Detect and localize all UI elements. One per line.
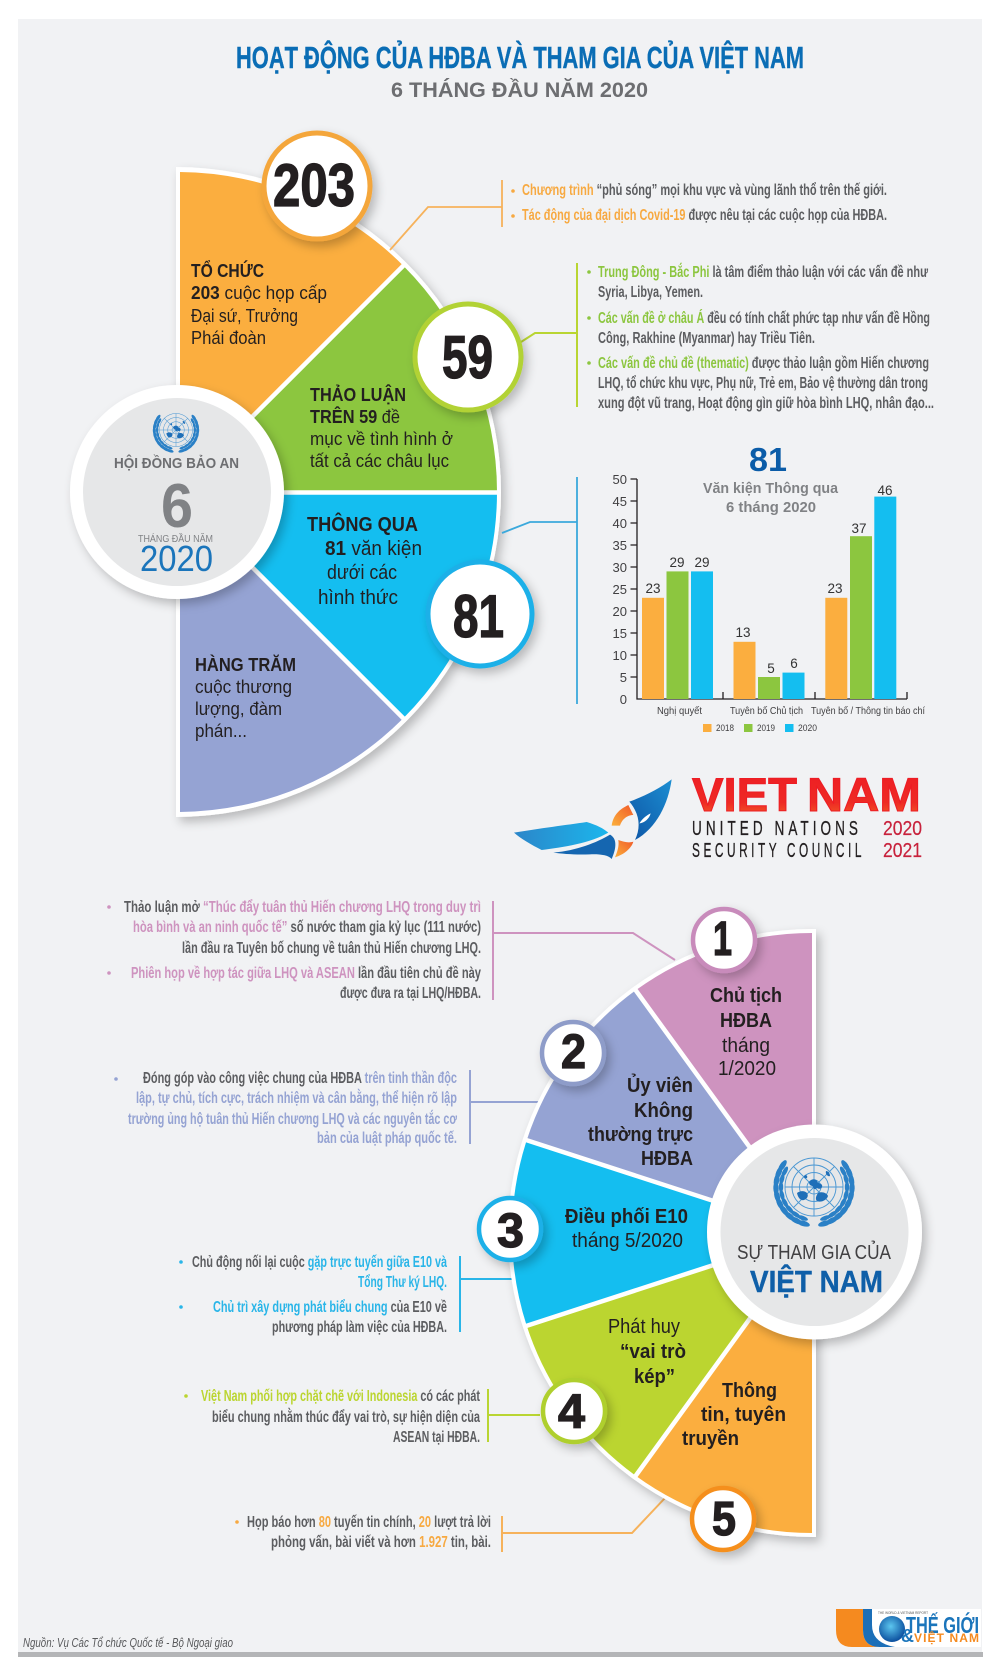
badge: 59 bbox=[415, 304, 521, 410]
badge: 203 bbox=[264, 133, 370, 239]
pie chart: Viet Nam participation bbox=[508, 929, 816, 1537]
y axis labels: 45 bbox=[613, 494, 627, 509]
text block: note 1: lần đầu ra Tuyên bố chung về tuân thủ Hiến chương LHQ. bbox=[182, 940, 481, 957]
sector: non-permanent member bbox=[527, 990, 812, 1233]
y axis labels: 10 bbox=[613, 648, 627, 663]
badge: 59: 59 bbox=[442, 324, 493, 391]
badge: 5: 5 bbox=[712, 1493, 736, 1546]
text block: note 2: lập, tự chủ, tích cực, trách nhiệm và cân bằng, thể hiện rõ lập bbox=[136, 1088, 457, 1107]
connector: 2 bbox=[470, 1070, 539, 1144]
text block: note 5 bbox=[235, 1514, 491, 1551]
subtitle: 6 THÁNG ĐẦU NĂM 2020 bbox=[391, 79, 648, 102]
legend: 2018 bbox=[716, 723, 734, 734]
text: non-permanent member: Ủy viên bbox=[627, 1073, 693, 1097]
text: dual role: Phát huy bbox=[608, 1316, 680, 1338]
text: adopted: dưới các bbox=[327, 562, 397, 584]
y axis labels: 0 bbox=[620, 692, 627, 707]
connector: 1 bbox=[493, 901, 675, 1000]
badge: 5 bbox=[692, 1488, 754, 1550]
text: information bbox=[682, 1380, 786, 1450]
logo: The Gioi & Viet Nam: THE WORLD & VIETNAM REPORT bbox=[878, 1611, 929, 1615]
text: organised: Phái đoàn bbox=[191, 327, 266, 348]
sector: organised bbox=[177, 172, 403, 492]
icon: UN emblem bbox=[153, 413, 199, 453]
text: negotiations: phán... bbox=[195, 720, 247, 741]
text block: note 4: ASEAN tại HĐBA. bbox=[393, 1429, 480, 1446]
bar chart: documents adopted bbox=[613, 441, 925, 734]
sector: E10 coordinator bbox=[512, 1140, 812, 1326]
chart number: 81 bbox=[749, 441, 787, 478]
group: press statements bbox=[825, 483, 896, 699]
text block: note 3: Tổng Thư ký LHQ. bbox=[358, 1273, 447, 1291]
badge: 81: 81 bbox=[453, 583, 504, 650]
text block: note 2: bản của luật pháp quốc tế. bbox=[317, 1130, 457, 1147]
text: president: HĐBA bbox=[720, 1010, 772, 1032]
text block: note 4 bbox=[184, 1388, 480, 1446]
text: discussed: tất cả các châu lục bbox=[310, 450, 449, 471]
connector: 59 bbox=[521, 263, 577, 407]
text: E10 coordinator: Điều phối E10 bbox=[565, 1206, 688, 1228]
text block: note 2 bbox=[114, 1070, 457, 1147]
y axis labels: 50 bbox=[613, 472, 627, 487]
text block: note 3: phương pháp làm việc của HĐBA. bbox=[272, 1319, 447, 1336]
hub title: VIỆT NAM bbox=[750, 1263, 883, 1299]
text: president: Chủ tịch bbox=[710, 985, 782, 1007]
connector: 203 bbox=[390, 180, 502, 250]
hub label: SỰ THAM GIA CỦA bbox=[737, 1240, 892, 1264]
chart title: Văn kiện Thông qua bbox=[703, 480, 839, 497]
text block: note 3: Chủ động nối lại cuộc gặp trực tuyến giữa E10 và bbox=[192, 1254, 447, 1271]
text: negotiations: HÀNG TRĂM bbox=[195, 654, 296, 675]
category labels bbox=[657, 705, 925, 717]
logo: Viet Nam UN Security Council: 2020 bbox=[883, 818, 922, 840]
text: non-permanent member bbox=[588, 1073, 693, 1170]
sector: adopted bbox=[177, 492, 497, 718]
logo: Viet Nam UN Security Council: 2021 bbox=[883, 840, 922, 862]
text: organised: TỔ CHỨC bbox=[191, 260, 264, 281]
group: presidential statements: 13 bbox=[735, 625, 751, 640]
y axis labels: 30 bbox=[613, 560, 627, 575]
text: non-permanent member: Không bbox=[634, 1100, 693, 1122]
text: E10 coordinator: tháng 5/2020 bbox=[572, 1230, 683, 1252]
text block: note 1 bbox=[107, 898, 481, 1002]
hub: Viet Nam participation bbox=[707, 1124, 922, 1340]
hub: security council bbox=[70, 385, 284, 599]
chart title: 6 tháng 2020 bbox=[726, 499, 816, 516]
text: adopted: hình thức bbox=[318, 587, 398, 609]
text: E10 coordinator bbox=[565, 1206, 688, 1252]
text block: note 3 bbox=[179, 1254, 447, 1336]
text: organised: 203 cuộc họp cấp bbox=[191, 282, 327, 303]
badge: 2: 2 bbox=[561, 1026, 586, 1079]
text block: note 2: trường ủng hộ tuân thủ Hiến chương LHQ và các nguyên tắc cơ bbox=[128, 1109, 457, 1128]
group: press statements: 23 bbox=[827, 581, 843, 596]
pie chart: activities bbox=[176, 167, 501, 817]
text block: 59 notes: Công, Rakhine (Myanmar) hay Triều Tiên. bbox=[598, 330, 815, 347]
chart title bbox=[703, 480, 839, 516]
group: resolutions: 29 bbox=[669, 555, 685, 570]
badge: 1 bbox=[693, 909, 755, 971]
text: dual role bbox=[608, 1316, 686, 1388]
text block: note 2: Đóng góp vào công việc chung của HĐBA trên tinh thần độc bbox=[143, 1070, 457, 1087]
group: presidential statements: 5 bbox=[767, 661, 775, 676]
text block: 59 notes bbox=[587, 262, 934, 412]
legend: 2020 bbox=[798, 723, 817, 734]
group: presidential statements bbox=[734, 625, 804, 699]
connector: 4 bbox=[488, 1389, 540, 1442]
text: organised bbox=[191, 260, 327, 348]
text: adopted: 81 văn kiện bbox=[325, 538, 422, 560]
group: resolutions bbox=[642, 555, 713, 699]
axes bbox=[630, 479, 907, 699]
text: non-permanent member: thường trực bbox=[588, 1124, 693, 1146]
sector: negotiations bbox=[180, 492, 403, 812]
badge: 203: 203 bbox=[273, 152, 355, 219]
text: negotiations: cuộc thương bbox=[195, 676, 292, 697]
group: resolutions: 29 bbox=[694, 555, 710, 570]
text: dual role: “vai trò bbox=[620, 1341, 686, 1363]
text block: note 4: Việt Nam phối hợp chặt chẽ với Indonesia có các phát bbox=[201, 1388, 480, 1405]
group: press statements: 46 bbox=[877, 483, 893, 498]
text: discussed bbox=[310, 384, 453, 471]
badge: 3: 3 bbox=[497, 1205, 524, 1258]
text block: 203 notes bbox=[511, 181, 887, 224]
legend: 2019 bbox=[757, 723, 775, 734]
text block: note 5: phỏng vấn, bài viết và hơn 1.927 tin, bài. bbox=[271, 1534, 491, 1551]
text block: note 3: Chủ trì xây dựng phát biểu chung của E10 về bbox=[213, 1298, 447, 1316]
text: president: 1/2020 bbox=[718, 1058, 776, 1080]
y axis labels: 25 bbox=[613, 582, 627, 597]
y axis labels: 40 bbox=[613, 516, 627, 531]
y axis labels: 35 bbox=[613, 538, 627, 553]
text: information: Thông bbox=[722, 1380, 777, 1402]
footer bar bbox=[18, 1652, 983, 1657]
text block: 59 notes: Syria, Libya, Yemen. bbox=[598, 284, 703, 301]
text block: note 4: biểu chung nhằm thúc đẩy vai trò, sự hiện diện của bbox=[212, 1407, 480, 1426]
text: non-permanent member: HĐBA bbox=[641, 1148, 693, 1170]
hub label: HỘI ĐỒNG BẢO AN bbox=[114, 454, 239, 472]
text: negotiations: lượng, đàm bbox=[195, 698, 282, 719]
sector: discussed bbox=[177, 266, 497, 492]
category labels: Nghị quyết bbox=[657, 705, 702, 717]
y axis labels: 15 bbox=[613, 626, 627, 641]
text: adopted bbox=[307, 512, 422, 609]
text: discussed: TRÊN 59 đề bbox=[310, 406, 400, 427]
badge: 4 bbox=[543, 1380, 605, 1442]
text: dual role: kép” bbox=[634, 1366, 675, 1388]
logo: The Gioi & Viet Nam: VIỆT NAM bbox=[914, 1630, 979, 1645]
text: discussed: mục về tình hình ở bbox=[310, 428, 453, 449]
logo: Viet Nam UN Security Council: UNITED NATIONS bbox=[692, 818, 862, 840]
text block: 203 notes: Tác động của đại dịch Covid-19 được nêu tại các cuộc họp của HĐBA. bbox=[522, 207, 887, 224]
icon: UN emblem bbox=[773, 1158, 855, 1228]
sector: information bbox=[636, 1233, 812, 1533]
y axis labels: 20 bbox=[613, 604, 627, 619]
badge: 3 bbox=[479, 1198, 541, 1260]
text: discussed: THẢO LUẬN bbox=[310, 384, 406, 405]
hub period: THÁNG ĐẦU NĂM bbox=[138, 532, 213, 545]
badge: 4: 4 bbox=[558, 1386, 585, 1439]
text: organised: Đại sứ, Trưởng bbox=[191, 305, 298, 326]
sector: president bbox=[636, 933, 812, 1233]
logo: The Gioi & Viet Nam bbox=[836, 1609, 981, 1647]
y axis labels: 5 bbox=[620, 670, 627, 685]
text: president bbox=[710, 985, 782, 1080]
hub number: 6 bbox=[161, 472, 193, 541]
logo: Viet Nam UN Security Council bbox=[514, 768, 922, 862]
badge: 1: 1 bbox=[713, 913, 732, 966]
category labels: Tuyên bố Chủ tịch bbox=[730, 705, 803, 717]
sector: dual role bbox=[527, 1233, 812, 1476]
text: information: tin, tuyên bbox=[701, 1404, 786, 1426]
text block: note 5: Họp báo hơn 80 tuyến tin chính, 20 lượt trả lời bbox=[247, 1514, 491, 1531]
connector: 3 bbox=[460, 1256, 513, 1332]
text: president: tháng bbox=[722, 1035, 770, 1057]
logo: Viet Nam UN Security Council: NAM bbox=[807, 768, 921, 821]
group: resolutions: 23 bbox=[645, 581, 661, 596]
group: press statements: 37 bbox=[851, 521, 867, 536]
text: negotiations bbox=[195, 654, 296, 741]
y axis labels bbox=[613, 472, 627, 707]
category labels: Tuyên bố / Thông tin báo chí bbox=[811, 705, 925, 717]
source note: Nguồn: Vụ Các Tổ chức Quốc tế - Bộ Ngoại giao bbox=[23, 1636, 233, 1650]
badge: 81 bbox=[428, 562, 532, 666]
badge: 2 bbox=[542, 1022, 604, 1084]
icon: dove bbox=[514, 779, 672, 859]
text block: note 1: Phiên họp về hợp tác giữa LHQ và ASEAN lần đầu tiên chủ đề này bbox=[131, 965, 481, 982]
logo: Viet Nam UN Security Council: SECURITY COUNCIL bbox=[692, 840, 865, 862]
legend bbox=[703, 723, 817, 734]
hub year: 2020 bbox=[140, 538, 213, 579]
text: adopted: THÔNG QUA bbox=[307, 512, 418, 536]
text: information: truyền bbox=[682, 1428, 739, 1450]
logo: The Gioi & Viet Nam: & bbox=[901, 1626, 914, 1646]
text block: note 1: Thảo luận mở “Thúc đẩy tuân thủ Hiến chương LHQ trong duy trì bbox=[124, 898, 481, 916]
text block: note 1: hòa bình và an ninh quốc tế” số nước tham gia kỷ lục (111 nước) bbox=[133, 919, 481, 936]
connector: 81 bbox=[502, 477, 577, 704]
connector: 5 bbox=[502, 1498, 665, 1552]
group: presidential statements: 6 bbox=[790, 656, 798, 671]
wordmark: VIET bbox=[692, 768, 797, 821]
text block: note 1: được đưa ra tại LHQ/HĐBA. bbox=[340, 985, 481, 1002]
